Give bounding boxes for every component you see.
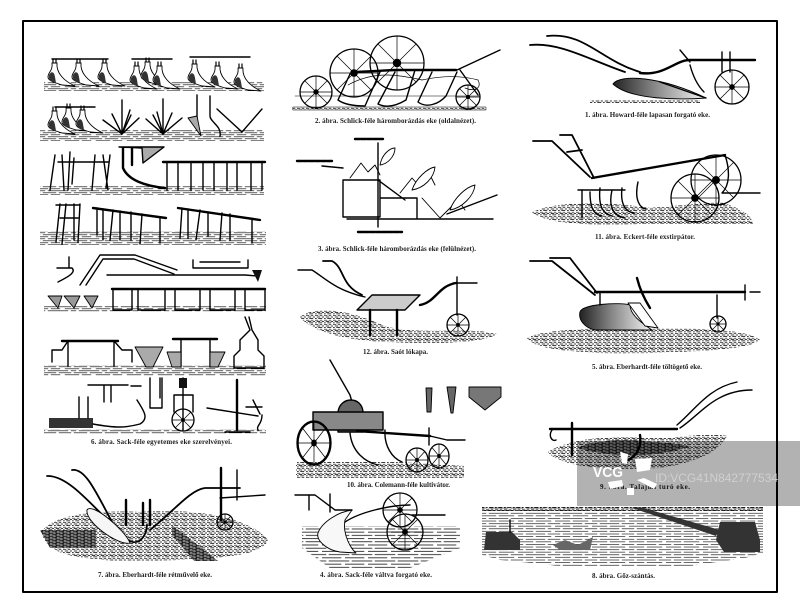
soil	[300, 310, 497, 343]
figure 7: Eberhardt plough	[40, 468, 268, 579]
machine body	[338, 400, 363, 432]
figure 1: Howard plough	[530, 36, 755, 119]
soil	[42, 511, 268, 561]
arched beam	[420, 283, 456, 305]
handles	[530, 36, 640, 72]
figure 11: Eckert extirpator	[532, 135, 760, 241]
handles	[677, 382, 752, 428]
wheels	[300, 76, 332, 108]
figure 8: steam ploughing scene	[482, 507, 763, 580]
far field edge	[482, 507, 763, 511]
caption: figure 7: 7. ábra. Eberhardt-féle rétművelő eke.	[98, 571, 212, 579]
mouldboard	[318, 510, 356, 553]
mouldboard	[613, 78, 706, 99]
ground	[293, 107, 486, 110]
row 3: cultivator tines and comb	[40, 147, 265, 195]
figure 2: Schlick three-furrow plough, side view	[293, 36, 500, 125]
mouldboards	[338, 70, 457, 106]
watermark mark: VCG	[593, 464, 623, 481]
row 6: cross sections	[44, 317, 266, 376]
caption: figure 10: 10. ábra. Colemann-féle kultivátor.	[347, 481, 450, 489]
caption: figure 2: 2. ábra. Schlick-féle háromborázdás eke (oldalnézet).	[315, 117, 476, 125]
blades	[380, 148, 475, 210]
wheels	[383, 493, 417, 527]
caption: figure 8: 8. ábra. Gőz-szántás.	[592, 572, 655, 580]
row 2: plough bodies and tines	[40, 95, 264, 141]
tines	[350, 430, 402, 465]
blade parts	[426, 388, 432, 412]
figure 5: Eberhardt ridging plough	[527, 258, 760, 371]
field	[482, 507, 763, 566]
figure 4: turnwrest plough	[295, 493, 460, 579]
watermark logo	[608, 452, 657, 495]
beam	[550, 428, 677, 430]
caption: figure 4: 4. ábra. Sack-féle váltva forgató eke.	[320, 571, 432, 579]
caption: figure 12: 12. ábra. Saót lókapa.	[363, 348, 428, 356]
figure 9: subsoil plough	[548, 382, 752, 491]
shares	[350, 163, 465, 218]
soil	[302, 526, 460, 568]
row 1: plough bodies	[44, 57, 264, 91]
frame	[322, 143, 493, 227]
mouldboard	[580, 304, 652, 330]
figure 6: universal plough parts	[40, 57, 266, 446]
tree line	[632, 507, 720, 536]
wheels	[691, 155, 741, 205]
caption: figure 6: 6. ábra. Sack-féle egyetemes eke szerelvényei.	[91, 438, 232, 446]
soil	[527, 328, 760, 353]
beam and coulter	[640, 60, 755, 73]
handles and beam	[47, 470, 147, 542]
lever	[330, 360, 352, 402]
handles	[530, 258, 597, 295]
furrows	[40, 525, 218, 561]
figure 10: Colemann cultivator	[296, 360, 501, 489]
soil	[296, 462, 464, 478]
T bars	[297, 139, 402, 232]
watermark id: ID:VCG41N842777534	[655, 473, 779, 485]
beam	[592, 155, 725, 178]
row 4: cultivator frames	[40, 204, 266, 245]
figure 3: Schlick three-furrow plough, plan view	[297, 139, 497, 253]
caption: figure 5: 5. ábra. Eberhardt-féle töltögető eke.	[592, 363, 702, 371]
right steam engine	[716, 522, 760, 552]
left steam engine	[484, 532, 520, 550]
caption: figure 11: 11. ábra. Eckert-féle exstirpátor.	[595, 233, 695, 241]
watermark band	[577, 441, 800, 506]
handles	[298, 270, 365, 297]
caption: figure 1: 1. ábra. Howard-féle lapasan forgató eke.	[585, 111, 710, 119]
tines	[582, 182, 646, 218]
soil	[548, 435, 727, 469]
plough	[553, 537, 593, 550]
handles	[533, 135, 594, 178]
ground	[590, 100, 700, 103]
row 5: bent rods and comb frame	[44, 255, 266, 312]
caption: figure 9: 9. ábra. Talajmi turó eke.	[600, 483, 690, 491]
caption: figure 3: 3. ábra. Schlick-féle háromborázdás eke (felülnézet).	[318, 245, 476, 253]
handle	[295, 494, 335, 512]
beam	[595, 291, 745, 293]
wheels	[297, 421, 331, 465]
frame	[357, 295, 420, 310]
row 7: plough parts and wheel	[44, 378, 266, 434]
frame and handle	[356, 70, 456, 72]
figure 12: horse hoe	[298, 261, 497, 356]
soil	[532, 202, 753, 225]
stock photo watermark	[577, 441, 800, 506]
